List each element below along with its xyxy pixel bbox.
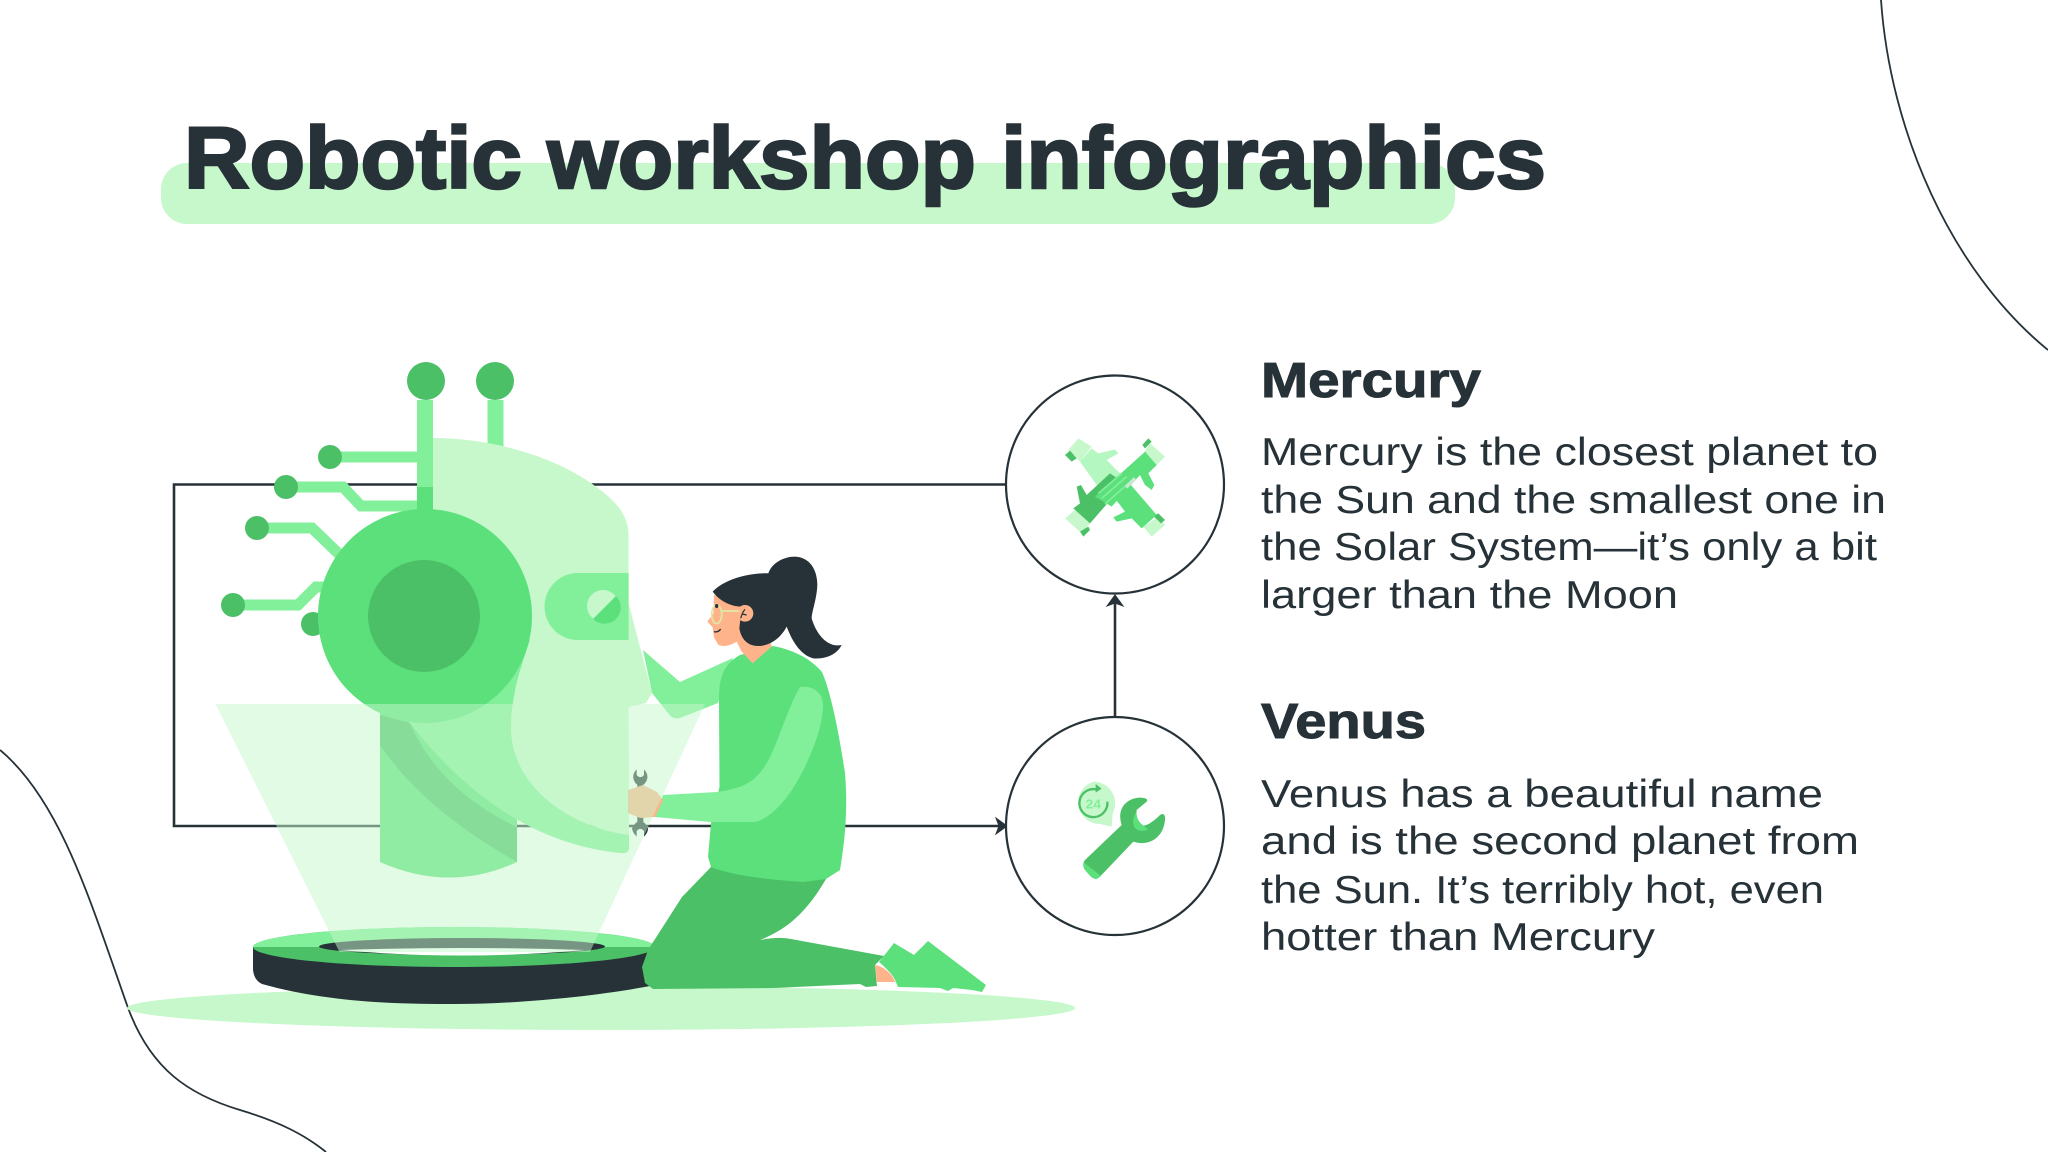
heading: Venus: Venus xyxy=(1261,695,1426,749)
body: Mercury description: larger than the Moon xyxy=(1261,574,1678,617)
icon: 24 hour wrench xyxy=(1078,782,1165,879)
wrench in hand xyxy=(632,769,648,837)
wire end dots and antennae xyxy=(221,362,514,636)
icon: 24 hour wrench: 24 xyxy=(1086,797,1102,812)
ear detail xyxy=(741,609,747,618)
person hand xyxy=(628,785,663,818)
neck shadow xyxy=(380,715,517,862)
floor shadow xyxy=(127,986,1075,1030)
illustration: robot workshop xyxy=(127,362,1075,1030)
robot wires xyxy=(233,400,496,605)
body: Venus description: Venus has a beautiful name xyxy=(1261,773,1823,816)
panel: Venus circle xyxy=(1006,717,1224,935)
person legs xyxy=(642,867,884,989)
person torso xyxy=(708,646,846,882)
body: Mercury description xyxy=(1261,431,1886,617)
face and neck xyxy=(707,595,772,663)
robot neck xyxy=(380,690,517,878)
person back arm xyxy=(643,650,733,718)
text block: Mercury xyxy=(1261,354,1886,617)
body: Mercury description: Mercury is the closest planet to xyxy=(1261,431,1878,474)
robot jaw side xyxy=(380,560,629,853)
antenna base xyxy=(417,487,433,511)
panel: Mercury circle xyxy=(1006,376,1224,594)
title: Robotic workshop infographics xyxy=(184,110,1546,207)
robot brain disc xyxy=(318,509,532,723)
hair and ponytail xyxy=(713,557,842,658)
hologram projection beam xyxy=(216,704,705,952)
person front arm xyxy=(655,687,823,822)
body: Mercury description: the Solar System—it’s only a bit xyxy=(1261,526,1877,569)
robot ear panel xyxy=(544,573,629,640)
hologram base ring xyxy=(253,927,655,1004)
body: Venus description xyxy=(1261,773,1859,959)
eye xyxy=(715,604,718,608)
robot eye xyxy=(587,590,621,624)
person shoes xyxy=(879,941,986,992)
person: woman repairing robot xyxy=(628,557,986,992)
heading: Mercury: Mercury xyxy=(1261,354,1481,408)
arrow: connector from illustration to Mercury circle and Venus circle xyxy=(174,484,1123,834)
body: Venus description: hotter than Mercury xyxy=(1261,916,1656,959)
body: Venus description: and is the second planet from xyxy=(1261,820,1859,863)
icon: stacked hands xyxy=(1065,438,1165,537)
glasses xyxy=(712,605,739,624)
robot head shell xyxy=(433,438,652,835)
person head xyxy=(707,557,842,663)
smile xyxy=(714,629,721,632)
person foot xyxy=(875,965,895,982)
body: Mercury description: the Sun and the smallest one in xyxy=(1261,479,1886,522)
body: Venus description: the Sun. It’s terribly hot, even xyxy=(1261,869,1824,912)
text block: Venus xyxy=(1261,695,1859,959)
ear xyxy=(737,605,753,622)
